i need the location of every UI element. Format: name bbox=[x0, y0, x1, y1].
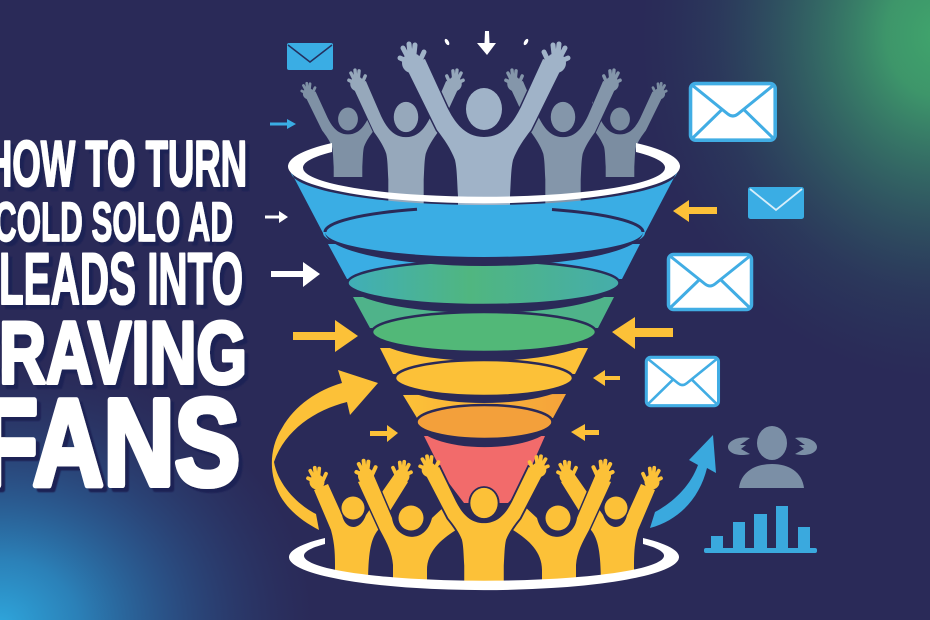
top crowd: grey figures bbox=[300, 42, 668, 205]
icon: large envelope 3 bbox=[646, 357, 719, 406]
arrow: white down top bbox=[477, 31, 496, 55]
icon: large envelope 2 bbox=[668, 254, 752, 310]
title: COLD SOLO AD bbox=[0, 190, 233, 253]
icon: large envelope 1 bbox=[691, 84, 775, 140]
arrow: large yellow left bbox=[293, 320, 358, 352]
icon: blue envelope top left bbox=[287, 43, 333, 70]
arrow: small blue bbox=[270, 119, 296, 129]
funnel level: orange bbox=[403, 394, 566, 447]
funnel level: green bbox=[353, 297, 614, 361]
icon: blue envelope right bbox=[748, 187, 804, 219]
bottom ring bbox=[289, 538, 679, 590]
curved yellow arrow bbox=[272, 370, 378, 530]
arrow: large yellow right bbox=[612, 317, 673, 349]
funnel level: blue top bbox=[291, 172, 677, 266]
funnel bbox=[288, 143, 680, 503]
funnel level: teal bbox=[328, 244, 640, 313]
arrow: yellow right upper bbox=[673, 200, 717, 222]
blue growth arrow bbox=[650, 435, 716, 528]
title bbox=[0, 127, 247, 512]
sparks at top bbox=[444, 38, 529, 46]
funnel level: yellow bbox=[380, 348, 588, 403]
arrow: yellow right small bbox=[593, 370, 620, 386]
icon: person with signal marks bbox=[728, 426, 817, 488]
arrow: small white bbox=[265, 211, 288, 223]
arrow: yellow right lower bbox=[571, 424, 599, 441]
funnel level: red tip bbox=[424, 436, 545, 503]
bar chart bbox=[704, 506, 817, 553]
arrow: large white bbox=[271, 262, 320, 287]
funnel rim bbox=[288, 143, 680, 203]
bottom crowd: yellow figures bbox=[306, 454, 663, 581]
arrow: yellow left small bbox=[370, 425, 398, 442]
title: LEADS INTO bbox=[0, 239, 243, 320]
arrows pointing into funnel bbox=[265, 31, 717, 442]
